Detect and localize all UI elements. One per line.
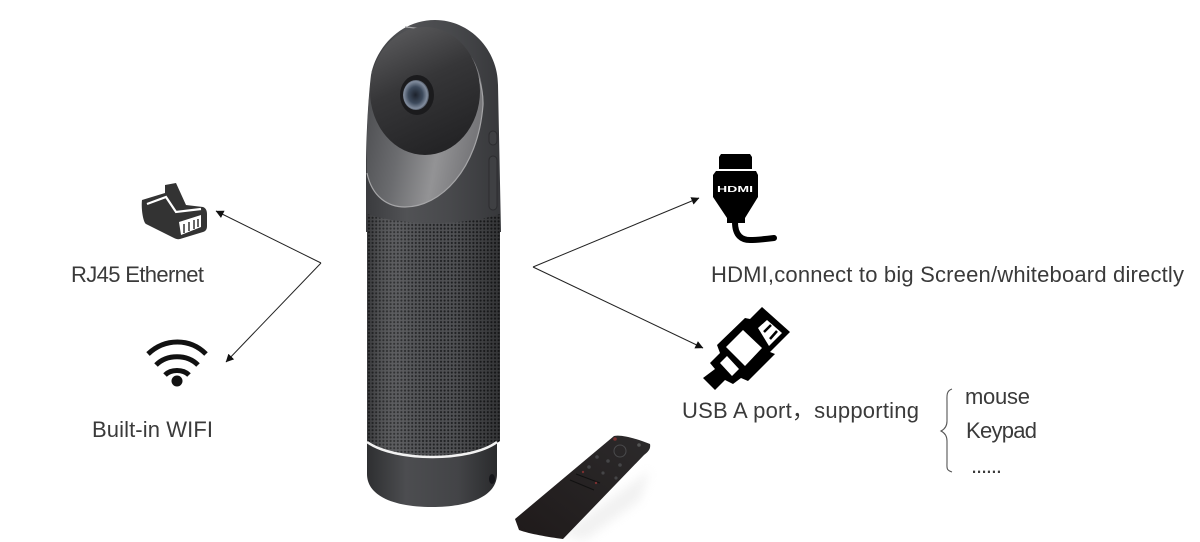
label: RJ45 Ethernet: RJ45 Ethernet (71, 262, 204, 287)
brace (941, 389, 952, 472)
base (367, 441, 497, 507)
remote control (515, 436, 650, 540)
scoop rim (367, 27, 483, 207)
speaker grille (367, 214, 500, 458)
camera disc (370, 27, 480, 155)
arrow: to wifi (226, 263, 321, 362)
lens (400, 75, 434, 115)
arrow: to HDMI (533, 198, 699, 267)
label: USB A port: USB A port，supporting (682, 398, 919, 423)
light ring (367, 442, 497, 457)
conference camera device (366, 20, 501, 507)
icon: HDMI connector (713, 154, 774, 240)
label: ellipsis: ...... (971, 453, 1002, 478)
base port (489, 474, 495, 484)
label: HDMI: HDMI,connect to big Screen/whiteboard directly (711, 262, 1184, 287)
arrow: to USB (533, 267, 703, 348)
icon: RJ45 ethernet (142, 183, 207, 239)
label: mouse: mouse (965, 384, 1030, 409)
side buttons (489, 131, 497, 210)
camera scoop (367, 55, 483, 207)
icon: USB connector (703, 307, 790, 390)
device upper housing (366, 20, 501, 232)
icon: HDMI connector: HDMI (717, 185, 753, 194)
icon: wifi (148, 342, 206, 386)
label: Keypad: Keypad (966, 418, 1037, 443)
arrow: to ethernet (216, 211, 321, 263)
label: Built-in WIFI: Built-in WIFI (92, 417, 213, 442)
